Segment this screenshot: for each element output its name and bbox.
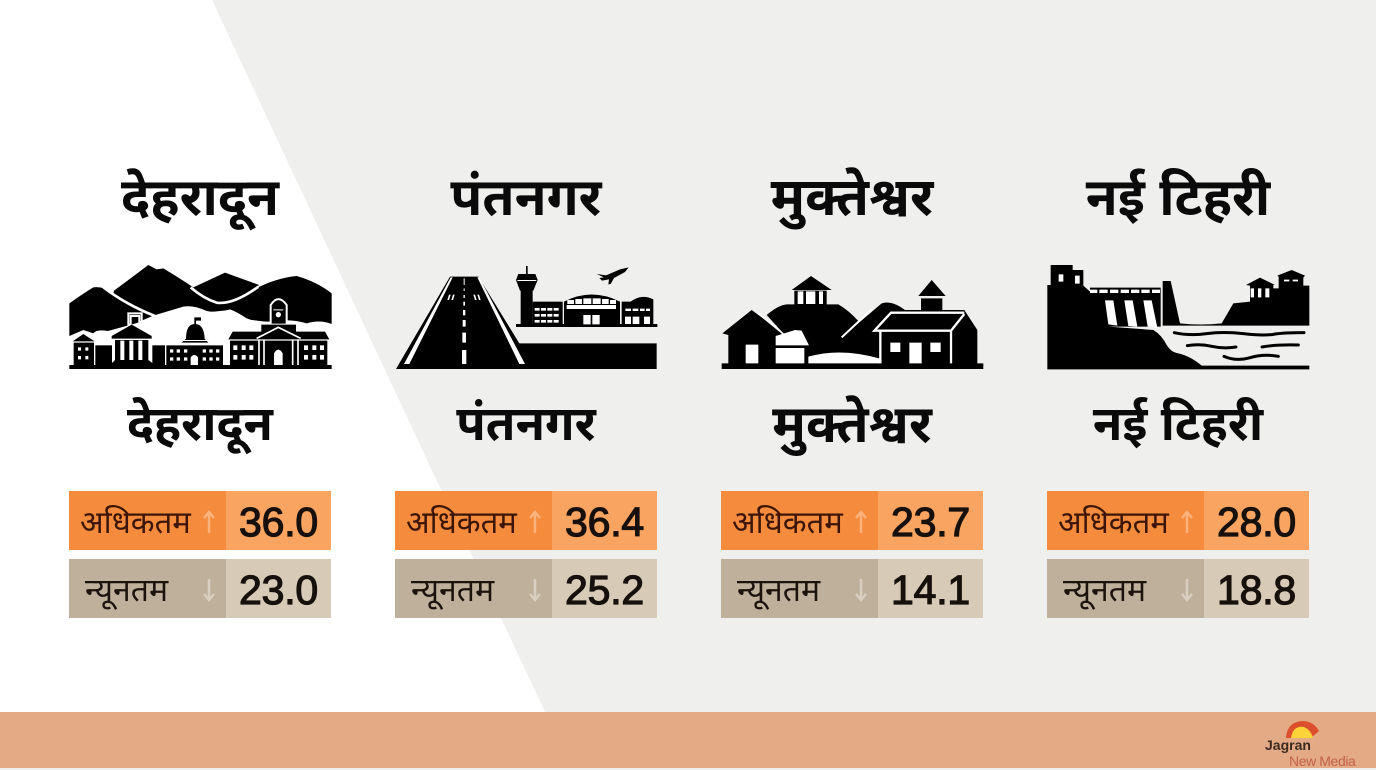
panel: Mukteshwar temperatures: अधिकतम <box>732 505 843 540</box>
panel: New Tehri temperatures <box>1047 491 1309 618</box>
footer band <box>0 712 1376 768</box>
panel: New Tehri temperatures: 18.8 <box>1217 567 1296 613</box>
heading: New Tehri repeated: नई टिहरी <box>1093 398 1263 451</box>
icon: New Tehri dam and river <box>1047 265 1310 370</box>
heading: Pantnagar: पंतनगर <box>450 169 602 227</box>
heading: Dehradun: देहरादून <box>121 169 279 227</box>
panel: Mukteshwar temperatures: 14.1 <box>891 567 970 613</box>
icon: Dehradun mountains and buildings <box>69 265 332 369</box>
panel: Dehradun temperatures <box>69 491 331 618</box>
icon: Mukteshwar hill village <box>722 276 984 369</box>
icon: logo sun arc <box>1286 721 1319 738</box>
panel: Dehradun temperatures: न्यूनतम <box>85 572 168 608</box>
panel: Mukteshwar temperatures: 23.7 <box>891 499 970 545</box>
heading: Mukteshwar repeated: मुक्तेश्वर <box>772 396 932 454</box>
panel: Pantnagar temperatures: 36.4 <box>565 499 644 545</box>
panel: Pantnagar temperatures: अधिकतम <box>406 505 517 540</box>
panel: Pantnagar temperatures: न्यूनतम <box>411 572 494 608</box>
panel: Mukteshwar temperatures: न्यूनतम <box>737 572 820 608</box>
heading: Dehradun repeated: देहरादून <box>127 398 273 451</box>
logo: Jagran New Media <box>1265 721 1356 769</box>
panel: New Tehri temperatures: न्यूनतम <box>1063 572 1146 608</box>
panel: New Tehri temperatures: 28.0 <box>1217 499 1296 545</box>
heading: Pantnagar repeated: पंतनगर <box>456 398 596 451</box>
panel: Dehradun temperatures: 36.0 <box>239 499 318 545</box>
panel: Dehradun temperatures: अधिकतम <box>80 505 191 540</box>
panel: New Tehri temperatures: अधिकतम <box>1058 505 1169 540</box>
logo wordmark: Jagran <box>1265 737 1311 753</box>
panel: Dehradun temperatures: 23.0 <box>239 567 318 613</box>
panel: Pantnagar temperatures <box>395 491 657 618</box>
logo tagline: New Media <box>1289 753 1355 769</box>
heading: Mukteshwar: मुक्तेश्वर <box>771 168 933 227</box>
panel: Pantnagar temperatures: 25.2 <box>565 567 644 613</box>
panel: Mukteshwar temperatures <box>721 491 983 618</box>
icon: Pantnagar runway and airport <box>396 266 658 369</box>
heading: New Tehri: नई टिहरी <box>1086 169 1270 227</box>
